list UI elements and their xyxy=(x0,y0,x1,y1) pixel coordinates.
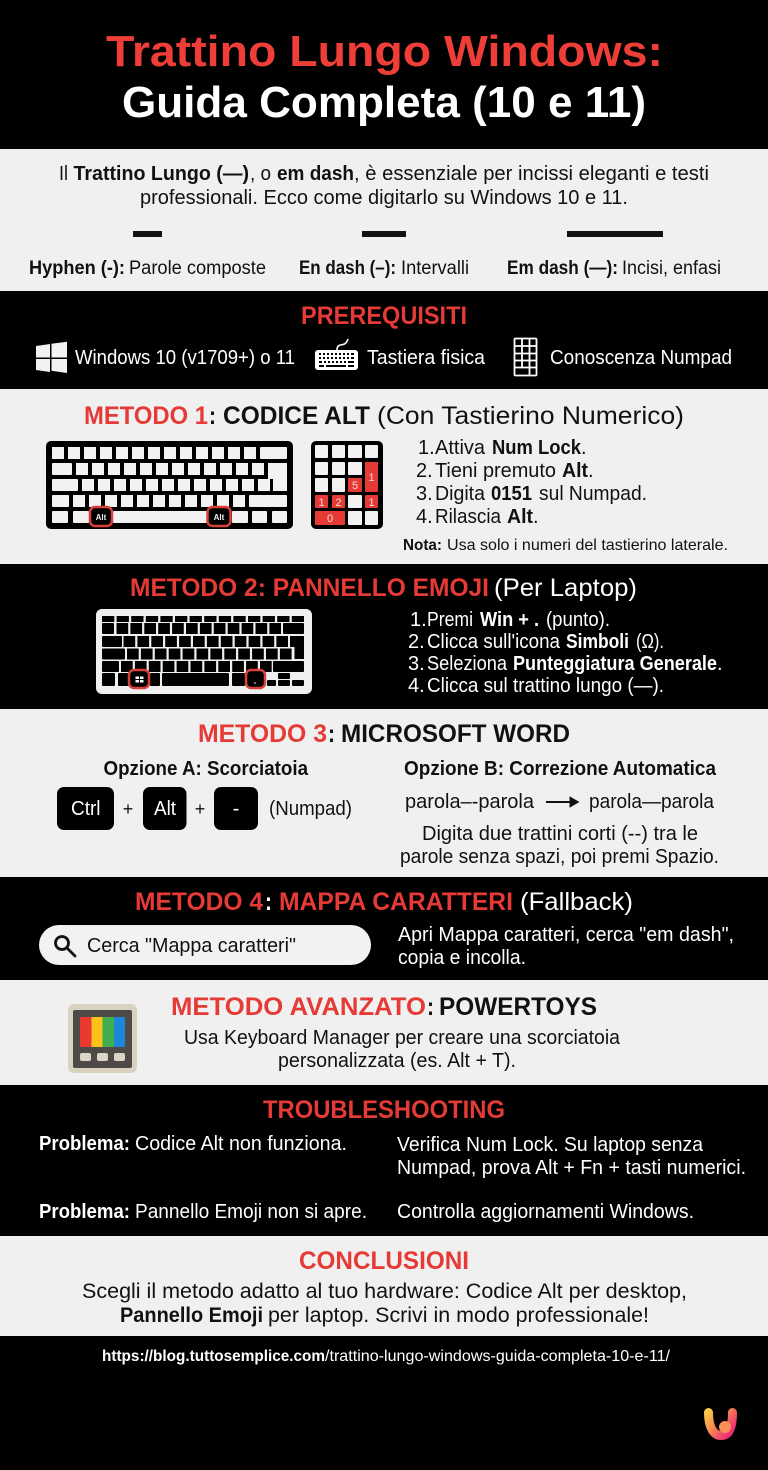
steps list metodo 1: . xyxy=(581,437,587,459)
highlighted alt key left: Alt xyxy=(96,513,107,522)
problem 1: Problema: xyxy=(39,1133,130,1155)
option b: autocorrect: parole senza spazi, poi premi Spazio. xyxy=(400,846,719,868)
title: Guida Completa (10 e 11) xyxy=(122,78,646,127)
problem 2: Controlla aggiornamenti Windows. xyxy=(397,1201,694,1223)
intro text: em dash xyxy=(277,163,354,185)
dash types: Hyphen (-): xyxy=(29,258,125,279)
heading: troubleshooting: TROUBLESHOOTING xyxy=(263,1096,505,1124)
panel: troubleshooting xyxy=(39,1096,746,1223)
steps list metodo 1: Alt xyxy=(507,506,533,528)
dash types xyxy=(29,231,721,279)
steps list metodo 1: . xyxy=(588,460,594,482)
source url: https://blog.tuttosemplice.com xyxy=(102,1348,325,1365)
heading: metodo 3 xyxy=(198,720,570,748)
keyboard illustration xyxy=(46,441,293,529)
problem 1: Numpad, prova Alt + Fn + tasti numerici. xyxy=(397,1157,746,1179)
heading: metodo 4 xyxy=(135,888,633,916)
steps list metodo 2: Win + . xyxy=(480,609,539,631)
heading: metodo 4: : xyxy=(265,888,272,916)
intro text: , o xyxy=(250,163,271,185)
conclusion text xyxy=(82,1280,687,1327)
steps list metodo 2 xyxy=(408,609,723,697)
problem 2: Problema: xyxy=(39,1201,130,1223)
heading: conclusioni: CONCLUSIONI xyxy=(299,1247,469,1275)
metodo 4 description xyxy=(398,924,734,969)
heading: metodo avanzato xyxy=(171,993,597,1021)
arrow xyxy=(546,798,578,806)
icon: logo xyxy=(708,1412,732,1436)
panel: prerequisiti xyxy=(36,302,732,376)
heading: metodo 4: METODO 4 xyxy=(135,888,263,916)
metodo 4 description: copia e incolla. xyxy=(398,947,526,969)
title xyxy=(106,27,663,127)
heading: metodo 1: (Con Tastierino Numerico) xyxy=(377,402,684,430)
steps list metodo 2: 3. xyxy=(408,653,425,675)
dash types: Parole composte xyxy=(129,258,266,279)
dash types: Em dash (—): xyxy=(507,258,618,279)
steps list metodo 2: Simboli xyxy=(566,631,629,653)
steps list metodo 2: Punteggiatura Generale xyxy=(513,653,717,675)
panel: metodo 4 xyxy=(39,888,734,969)
powertoys description: personalizzata (es. Alt + T). xyxy=(278,1050,516,1072)
option a: shortcut xyxy=(57,758,352,830)
intro text: , è essenziale per incissi eleganti e testi xyxy=(354,163,709,185)
steps list metodo 2: 1. xyxy=(410,609,427,631)
search bar xyxy=(39,925,371,965)
windows requirement: Windows 10 (v1709+) o 11 xyxy=(75,347,295,369)
numpad illustration: 2 xyxy=(335,497,342,509)
heading: metodo avanzato: POWERTOYS xyxy=(439,993,597,1021)
numpad requirement: Conoscenza Numpad xyxy=(550,347,732,369)
icon: numpad xyxy=(514,338,536,376)
key: alt: Alt xyxy=(154,798,176,820)
highlighted alt key right: Alt xyxy=(214,513,225,522)
numpad illustration: 1 xyxy=(318,497,325,509)
title: Trattino Lungo Windows: xyxy=(106,27,663,76)
highlighted period key xyxy=(246,670,265,688)
heading: metodo avanzato: : xyxy=(427,993,434,1021)
heading: metodo 3: MICROSOFT WORD xyxy=(341,720,570,748)
search bar: Cerca "Mappa caratteri" xyxy=(87,935,296,957)
problem 2 xyxy=(39,1201,694,1223)
heading: metodo 1: CODICE ALT xyxy=(223,402,370,430)
option a: shortcut: + xyxy=(195,799,205,819)
steps list metodo 2: 2. xyxy=(408,631,425,653)
steps list metodo 2: (punto). xyxy=(546,609,610,631)
option a: shortcut: + xyxy=(123,799,133,819)
icon: powertoys xyxy=(68,1004,137,1073)
problem 1: Verifica Num Lock. Su laptop senza xyxy=(397,1134,704,1156)
intro text xyxy=(59,163,709,209)
panel: conclusioni xyxy=(0,1236,768,1336)
steps list metodo 1: Alt xyxy=(562,460,588,482)
heading: metodo 3: : xyxy=(328,720,335,748)
problem 1: Codice Alt non funziona. xyxy=(135,1133,347,1155)
heading: prerequisiti: PREREQUISITI xyxy=(301,302,467,330)
numpad illustration: 1 xyxy=(368,472,375,484)
option a: shortcut: (Numpad) xyxy=(269,798,352,820)
panel: metodo avanzato xyxy=(0,980,768,1085)
heading: metodo 2: (Per Laptop) xyxy=(494,574,637,602)
highlighted windows key xyxy=(129,670,149,688)
source url xyxy=(102,1348,671,1365)
heading: metodo 1: : xyxy=(209,402,216,430)
heading: metodo avanzato: METODO AVANZATO xyxy=(171,993,426,1021)
problem 1 xyxy=(39,1133,746,1179)
steps list metodo 2: . xyxy=(717,653,723,675)
conclusion text: Pannello Emoji xyxy=(120,1304,263,1327)
laptop keyboard illustration xyxy=(96,609,312,694)
problem 2: Pannello Emoji non si apre. xyxy=(135,1201,367,1223)
steps list metodo 1: Rilascia xyxy=(435,506,502,528)
steps list metodo 2: Seleziona xyxy=(427,653,508,675)
steps list metodo 1: Tieni premuto xyxy=(435,460,556,482)
option b: autocorrect: Opzione B: Correzione Automatica xyxy=(404,758,717,780)
icon: keyboard xyxy=(315,339,358,370)
keyboard requirement: Tastiera fisica xyxy=(367,347,486,369)
note: Usa solo i numeri del tastierino laterale. xyxy=(447,537,728,554)
steps list metodo 1: . xyxy=(533,506,539,528)
heading: metodo 4: (Fallback) xyxy=(520,888,633,916)
option b: autocorrect xyxy=(400,758,719,868)
heading: metodo 2: METODO 2: PANNELLO EMOJI xyxy=(130,574,489,602)
dash types: En dash (–): xyxy=(299,258,396,279)
steps list metodo 1: 1. xyxy=(418,437,435,459)
option a: shortcut: Opzione A: Scorciatoia xyxy=(104,758,309,780)
key: minus xyxy=(214,787,258,830)
steps list metodo 2: Clicca sull'icona xyxy=(427,631,561,653)
steps list metodo 2: 4. xyxy=(408,675,425,697)
steps list metodo 1: 2. xyxy=(416,460,433,482)
steps list metodo 1: Digita xyxy=(435,483,486,505)
steps list metodo 1: 0151 xyxy=(491,483,532,505)
icon: windows xyxy=(36,342,67,373)
numpad illustration xyxy=(311,441,383,529)
heading: metodo 4: MAPPA CARATTERI xyxy=(279,888,513,916)
powertoys description: Usa Keyboard Manager per creare una scorciatoia xyxy=(184,1027,621,1049)
numpad illustration: 1 xyxy=(368,497,375,509)
source url: /trattino-lungo-windows-guida-completa-10-e-11/ xyxy=(325,1348,671,1365)
numpad illustration: 5 xyxy=(352,480,358,492)
highlighted alt key left xyxy=(90,507,112,526)
steps list metodo 2: Clicca sul trattino lungo (—). xyxy=(427,675,664,697)
heading: metodo 3: METODO 3 xyxy=(198,720,327,748)
key: ctrl xyxy=(57,787,114,830)
intro text: Trattino Lungo (—) xyxy=(74,163,249,185)
key: ctrl: Ctrl xyxy=(71,798,100,820)
panel: introduzione xyxy=(0,149,768,291)
steps list metodo 1: sul Numpad. xyxy=(539,483,647,505)
panel: metodo 1 xyxy=(0,389,768,564)
panel: metodo 2 xyxy=(96,574,723,697)
heading: metodo 1: METODO 1 xyxy=(84,402,208,430)
dash types: Intervalli xyxy=(401,258,469,279)
steps list metodo 1: 4. xyxy=(416,506,433,528)
numpad illustration: 0 xyxy=(327,513,333,525)
steps list metodo 1: Num Lock xyxy=(492,437,582,459)
conclusion text: per laptop. Scrivi in modo professionale! xyxy=(268,1304,649,1327)
dash types: Incisi, enfasi xyxy=(622,258,721,279)
intro text: professionali. Ecco come digitarlo su Windows 10 e 11. xyxy=(140,187,628,209)
option b: autocorrect: parola—parola xyxy=(589,791,715,813)
intro text: Il xyxy=(59,163,68,185)
key: alt xyxy=(143,787,186,830)
steps list metodo 1: Attiva xyxy=(435,437,486,459)
panel: metodo 3 xyxy=(0,709,768,877)
steps list metodo 2: (Ω). xyxy=(636,631,664,653)
highlighted alt key right xyxy=(208,507,230,526)
steps list metodo 1: 3. xyxy=(416,483,433,505)
powertoys description xyxy=(184,1027,621,1072)
option b: autocorrect: Digita due trattini corti (--) tra le xyxy=(422,823,698,845)
key: minus: - xyxy=(233,798,239,820)
steps list metodo 2: Premi xyxy=(427,609,473,631)
conclusion text: Scegli il metodo adatto al tuo hardware: Codice Alt per desktop, xyxy=(82,1280,687,1303)
icon: magnifier xyxy=(56,936,75,956)
steps list metodo 1 xyxy=(416,437,647,528)
heading: metodo 1 xyxy=(84,402,684,430)
metodo 4 description: Apri Mappa caratteri, cerca "em dash", xyxy=(398,924,734,946)
note: Nota: xyxy=(403,537,442,554)
option b: autocorrect: parola–-parola xyxy=(405,791,535,813)
